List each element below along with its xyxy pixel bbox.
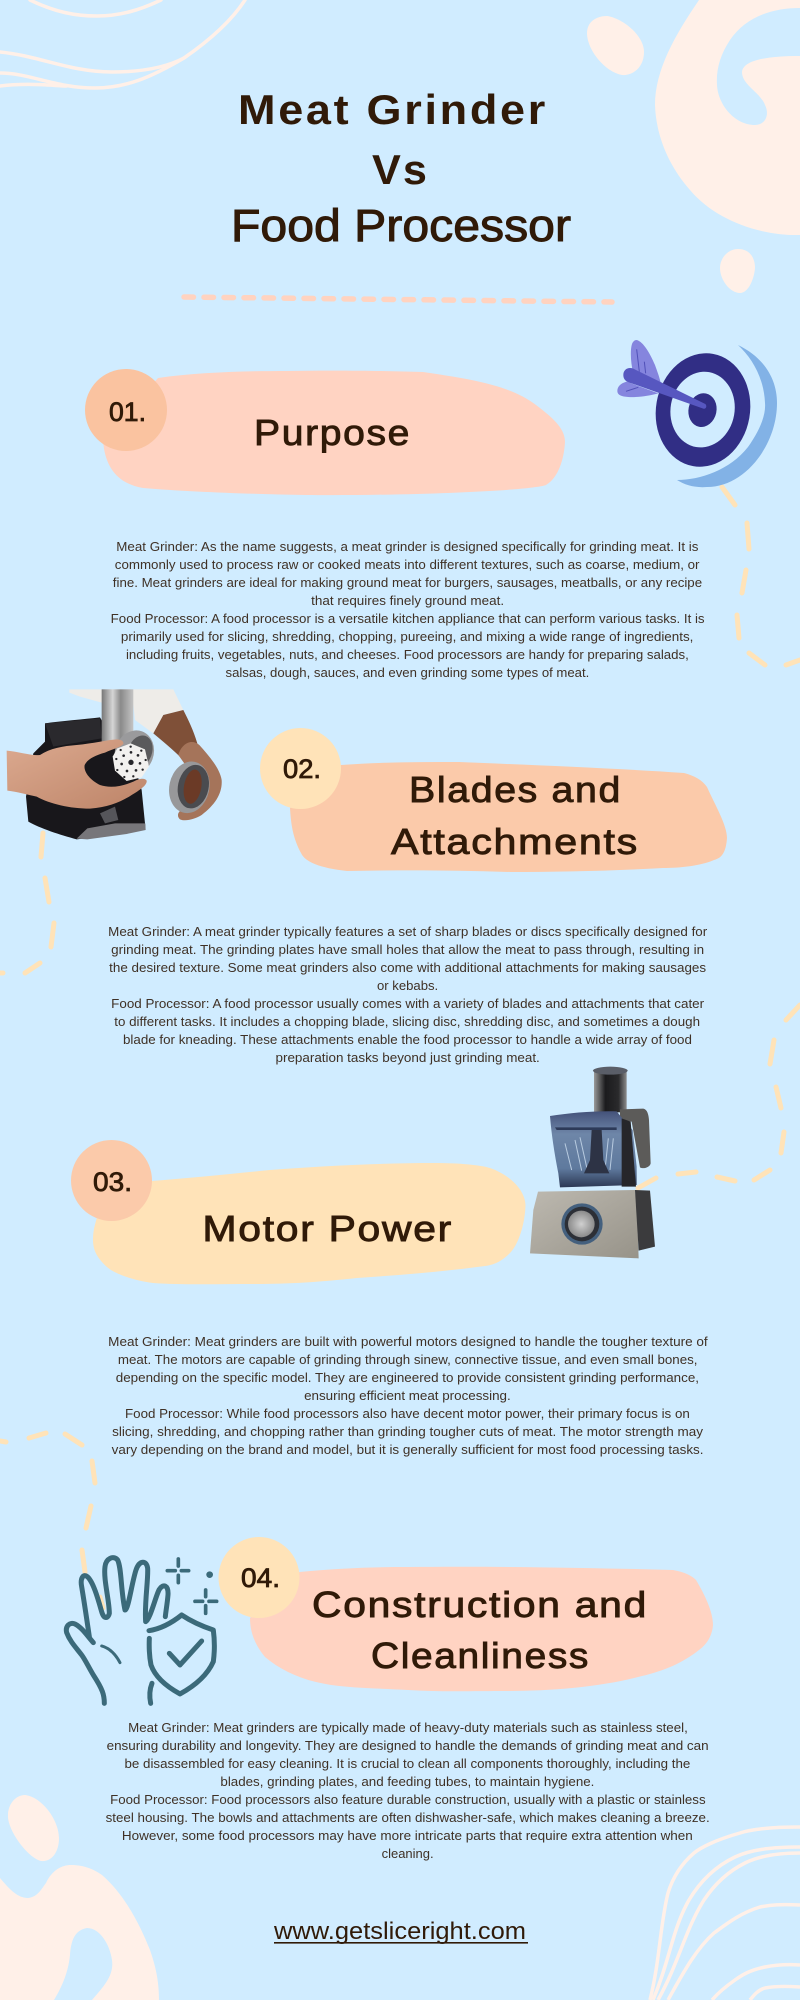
heading: construction and cleanliness: Construction and (312, 1584, 648, 1625)
number 01: 01. (109, 397, 146, 427)
text block: construction and cleanliness: cleaning. (382, 1846, 434, 1861)
icon: target with dart (617, 340, 777, 487)
heading: purpose: Purpose (254, 412, 411, 453)
text block: purpose (111, 539, 705, 680)
dashed path: section 1 to 2 (722, 487, 800, 665)
heading: blades and attachments: Blades and (409, 769, 622, 810)
heading: blades and attachments (391, 769, 639, 862)
text block: purpose: primarily used for slicing, shredding, chopping, pureeing, and mixing a wide range of ingredients, (121, 629, 693, 644)
background decoration: top-left curves (0, 0, 245, 88)
title (231, 86, 571, 251)
text block: blades and attachments: Meat Grinder: A meat grinder typically features a set of sharp blades or discs specifically designed for (108, 924, 708, 939)
heading: blades and attachments: Attachments (391, 821, 639, 862)
panel: blades and attachments heading (260, 728, 727, 872)
text block: construction and cleanliness: ensuring durability and longevity. They are designed to handle the demands of grinding meat and can (107, 1738, 709, 1753)
title divider (184, 297, 612, 302)
blob: construction (250, 1567, 713, 1691)
blob: blades (290, 762, 727, 872)
image: food processor (530, 1067, 655, 1258)
text block: construction and cleanliness: Meat Grinder: Meat grinders are typically made of heavy-duty materials such as stainless steel, (128, 1720, 688, 1735)
panel: construction and cleanliness heading (218, 1537, 713, 1691)
text block: motor power: slicing, shredding, and chopping rather than grinding tougher cuts of meat. The motor strength may (112, 1424, 703, 1439)
number 04: 04. (241, 1563, 280, 1593)
text block: purpose: fine. Meat grinders are ideal for making ground meat for burgers, sausages, meatballs, or any recipe (113, 575, 702, 590)
background decoration: bottom-left blobs (0, 1795, 159, 2000)
text block: blades and attachments: or kebabs. (377, 978, 438, 993)
text block: motor power: ensuring efficient meat processing. (304, 1388, 511, 1403)
text block: blades and attachments: blade for kneading. These attachments enable the food processor to handle a wide array of food (123, 1032, 692, 1047)
text block: motor power: vary depending on the brand and model, but it is generally sufficient for most food processing tasks. (112, 1442, 703, 1457)
text block: motor power (108, 1334, 708, 1457)
blob: motor power (93, 1163, 526, 1284)
dashed path: section 3 to 4 (0, 1433, 103, 1608)
title: Food Processor (231, 200, 571, 251)
text block: blades and attachments: preparation tasks beyond just grinding meat. (276, 1050, 540, 1065)
text block: construction and cleanliness: steel housing. The bowls and attachments are often dishwasher-safe, which makes cleaning a breeze. (106, 1810, 710, 1825)
text block: blades and attachments: the desired texture. Some meat grinders also come with additional attachments for making sausages (109, 960, 707, 975)
text block: construction and cleanliness: However, some food processors may have more intricate parts that require extra attention when (122, 1828, 693, 1843)
text block: construction and cleanliness: blades, grinding plates, and feeding tubes, to maintain hygiene. (220, 1774, 594, 1789)
text block: motor power: depending on the specific model. They are engineered to provide consistent grinding performance, (116, 1370, 699, 1385)
text block: blades and attachments (108, 924, 708, 1065)
title: Meat Grinder (238, 86, 548, 133)
heading: construction and cleanliness (312, 1584, 648, 1676)
background decoration: bottom-right curves (650, 1827, 800, 2000)
background decoration: top-right blobs (587, 0, 800, 293)
dashed path: section 2 to 3 (0, 833, 54, 973)
number badge 02 (260, 728, 341, 809)
panel: purpose heading (85, 369, 565, 495)
text block: blades and attachments: to different tasks. It includes a chopping blade, slicing disc, shredding disc, and sometimes a dough (114, 1014, 700, 1029)
dashed path: section 3 right (638, 1005, 800, 1188)
text block: motor power: Meat Grinder: Meat grinders are built with powerful motors designed to handle the tougher texture of (108, 1334, 708, 1349)
panel: motor power heading (71, 1140, 526, 1284)
text block: blades and attachments: grinding meat. The grinding plates have small holes that allow the meat to pass through, resulting in (111, 942, 704, 957)
text block: purpose: including fruits, vegetables, nuts, and cheeses. Food processors are handy for preparing salads, (126, 647, 689, 662)
text block: construction and cleanliness: be disassembled for easy cleaning. It is crucial to clean all components thoroughly, including the (124, 1756, 690, 1771)
icon: hand with shield (66, 1558, 217, 1703)
text block: motor power: meat. The motors are capable of grinding through sinew, connective tissue, and even small bones, (118, 1352, 698, 1367)
text block: motor power: Food Processor: While food processors also have decent motor power, their primary focus is on (125, 1406, 690, 1421)
number badge 01 (85, 369, 167, 451)
text block: purpose: commonly used to process raw or cooked meats into different textures, such as coarse, medium, or (115, 557, 700, 572)
text block: purpose: salsas, dough, sauces, and even grinding some types of meat. (226, 665, 589, 680)
heading: motor power: Motor Power (202, 1208, 453, 1249)
text block: purpose: that requires finely ground meat. (311, 593, 504, 608)
number badge 03 (71, 1140, 152, 1221)
heading: construction and cleanliness: Cleanliness (371, 1635, 590, 1676)
number badge 04 (218, 1537, 300, 1618)
image: hands assembling meat grinder (7, 689, 222, 839)
title: Vs (372, 146, 429, 193)
number 03: 03. (93, 1167, 132, 1197)
website link: www.getsliceright.com (273, 1918, 526, 1945)
text block: construction and cleanliness: Food Processor: Food processors also feature durable construction, usually with a plastic or stainless (110, 1792, 706, 1807)
text block: construction and cleanliness (106, 1720, 710, 1861)
text block: blades and attachments: Food Processor: A food processor usually comes with a variety of blades and attachments that cater (111, 996, 705, 1011)
text block: purpose: Food Processor: A food processor is a versatile kitchen appliance that can perform various tasks. It is (111, 611, 705, 626)
blob: purpose (103, 371, 565, 495)
text block: purpose: Meat Grinder: As the name suggests, a meat grinder is designed specifically for grinding meat. It is (116, 539, 699, 554)
number 02: 02. (283, 754, 321, 784)
